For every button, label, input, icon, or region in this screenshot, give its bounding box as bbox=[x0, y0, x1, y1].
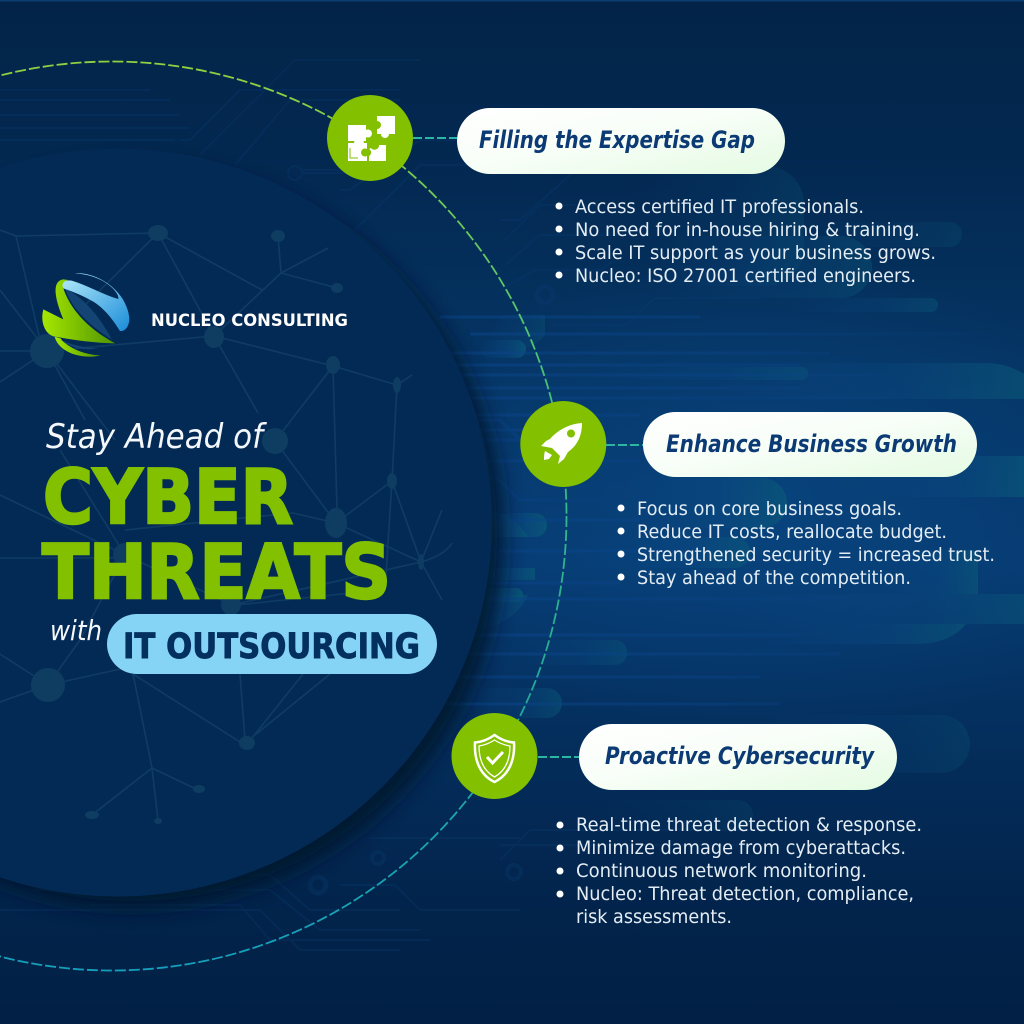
big circle shadow bbox=[0, 164, 504, 908]
title pill: it outsourcing bbox=[107, 614, 437, 674]
brand name: NUCLEO CONSULTING bbox=[151, 311, 348, 331]
heading pill bbox=[643, 412, 977, 477]
background rounded glow bars bbox=[450, 166, 1024, 830]
title line: stay ahead of: Stay Ahead of bbox=[46, 417, 268, 457]
bullet list bbox=[618, 498, 995, 589]
bullet list: Reduce IT costs, reallocate budget. bbox=[637, 521, 947, 543]
bullet list: Nucleo: Threat detection, compliance, bbox=[576, 883, 914, 905]
icon: puzzle bbox=[327, 95, 413, 181]
bullet list bbox=[556, 814, 922, 928]
connectors bbox=[413, 138, 643, 757]
bullet list: Focus on core business goals. bbox=[637, 498, 902, 520]
bullet list: Strengthened security = increased trust. bbox=[637, 544, 995, 566]
heading pill bbox=[579, 724, 897, 790]
bullet list bbox=[556, 196, 936, 287]
bullet list: Access certified IT professionals. bbox=[575, 196, 864, 218]
panel: enhance business growth bbox=[618, 412, 995, 589]
big circle panel bbox=[0, 148, 492, 896]
title line: threats: THREATS bbox=[42, 528, 391, 616]
bullet list: Scale IT support as your business grows. bbox=[575, 242, 936, 264]
heading pill: Proactive Cybersecurity bbox=[605, 742, 875, 770]
heading pill: Enhance Business Growth bbox=[666, 430, 957, 458]
upper circuit traces bbox=[0, 60, 760, 325]
bullet list: Minimize damage from cyberattacks. bbox=[576, 837, 906, 859]
connector ring bbox=[0, 62, 566, 970]
icon: shield bbox=[452, 713, 538, 799]
panel: proactive cybersecurity bbox=[556, 724, 922, 928]
bullet list: Nucleo: ISO 27001 certified engineers. bbox=[575, 265, 916, 287]
title line: cyber: CYBER bbox=[43, 453, 293, 541]
heading pill bbox=[457, 108, 785, 174]
bullet list: Stay ahead of the competition. bbox=[637, 567, 911, 589]
icon: rocket bbox=[520, 401, 606, 487]
heading pill: Filling the Expertise Gap bbox=[479, 126, 755, 154]
network pattern bbox=[0, 225, 452, 824]
background circuit lines bbox=[440, 317, 1024, 704]
bullet list: Real-time threat detection & response. bbox=[576, 814, 922, 836]
bullet list: risk assessments. bbox=[576, 906, 732, 928]
logo bbox=[42, 273, 129, 357]
title line: with: with bbox=[50, 614, 102, 647]
title pill: it outsourcing: IT OUTSOURCING bbox=[123, 627, 420, 667]
lower circuit traces bbox=[0, 830, 800, 950]
bullet list: Continuous network monitoring. bbox=[576, 860, 867, 882]
panel: filling the expertise gap bbox=[457, 108, 936, 287]
bullet list: No need for in-house hiring & training. bbox=[575, 219, 920, 241]
